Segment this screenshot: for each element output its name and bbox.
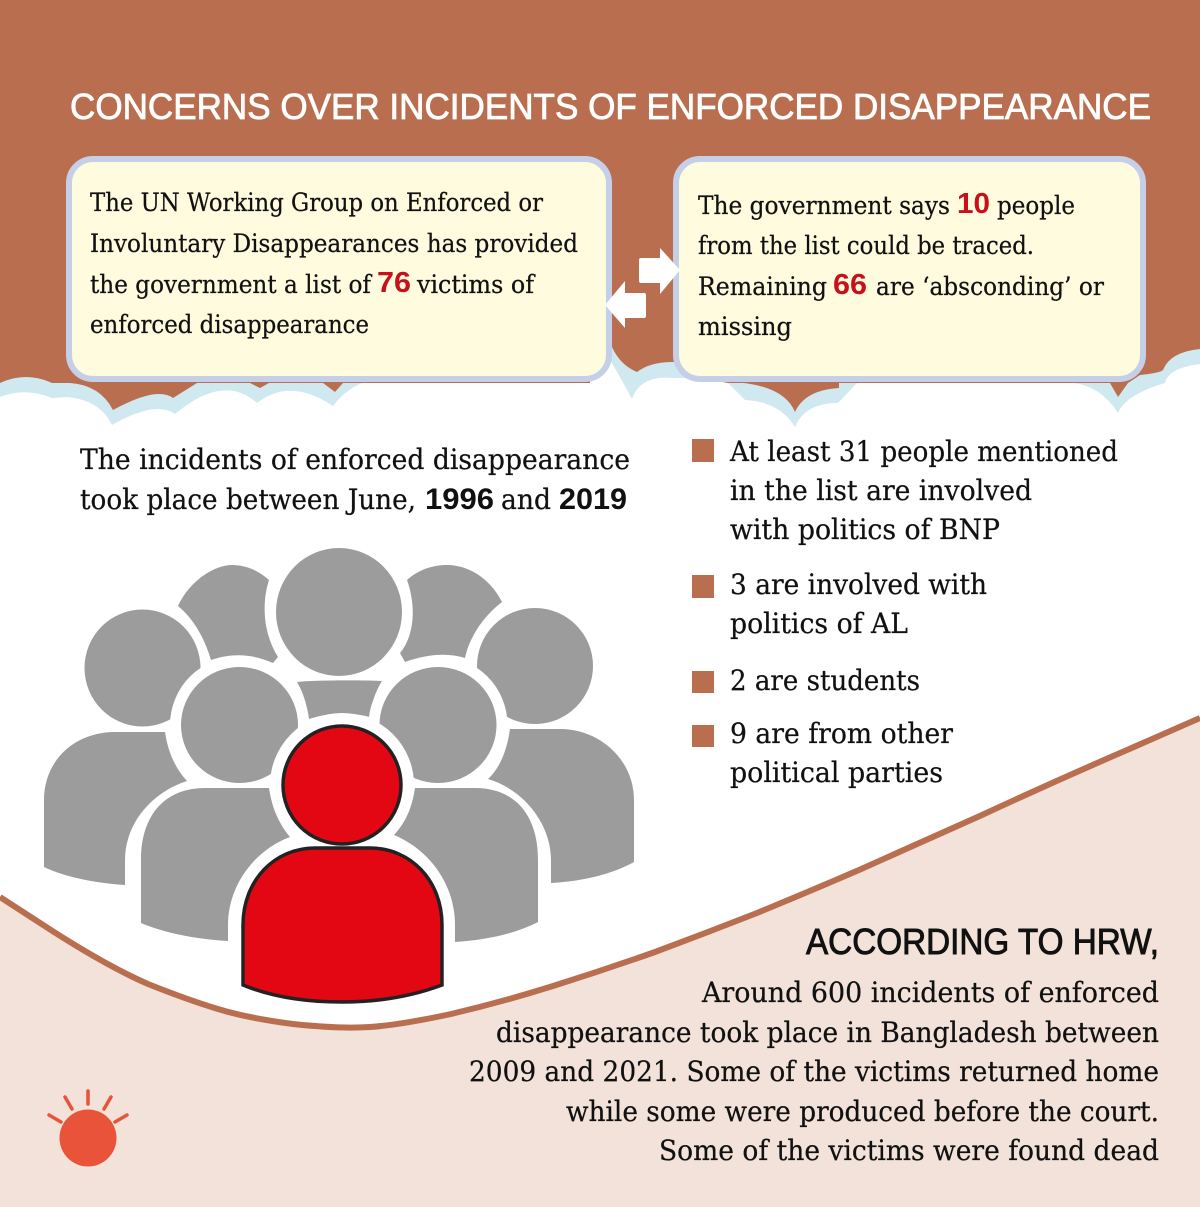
bullet: AL: 3 are involved with — [730, 568, 987, 601]
icon: sun logo — [49, 1091, 127, 1166]
panel: UN list of victims — [69, 159, 609, 379]
icon: exchange arrows — [605, 248, 680, 328]
panel text: UN list: 76 — [377, 267, 411, 299]
bullet: BNP: in the list are involved — [730, 474, 1032, 507]
top brown banner — [0, 0, 1200, 432]
bullet: BNP — [692, 435, 1118, 546]
icon: group of people with one red figure — [44, 548, 634, 1002]
panel text: UN list: enforced disappearance — [90, 310, 369, 339]
panel text: government response: 66 — [833, 269, 867, 301]
heading: according to HRW: ACCORDING TO HRW, — [806, 921, 1159, 962]
bullet: students: 2 are students — [730, 664, 920, 697]
white cloud layer — [0, 360, 1200, 520]
bullet: other parties: political parties — [730, 756, 943, 789]
panel text: UN list: victims of — [416, 270, 536, 299]
panel text: UN list: The UN Working Group on Enforced or — [90, 188, 543, 217]
brown wave line — [0, 718, 1200, 1028]
panel text: government response: missing — [698, 312, 792, 341]
beige bottom area — [0, 718, 1200, 1207]
text: HRW statement — [469, 976, 1159, 1167]
panel text: UN list — [90, 188, 578, 339]
panel text: government response: The government says — [698, 191, 950, 220]
panel text: government response: 10 — [957, 188, 990, 220]
bullet: BNP: with politics of BNP — [730, 513, 1000, 546]
panel text: UN list: the government a list of — [90, 270, 373, 299]
bullet: AL: politics of AL — [730, 607, 908, 640]
text: HRW statement: while some were produced before the court. — [566, 1095, 1159, 1128]
bullet: other parties: 9 are from other — [730, 717, 954, 750]
text: period of incidents: 2019 — [559, 483, 627, 516]
panel text: government response — [698, 188, 1104, 341]
text: period of incidents: took place between June, — [80, 483, 416, 516]
panel text: government response: are ‘absconding’ or — [876, 272, 1104, 301]
panel text: government response: from the list could be traced. — [698, 231, 1034, 260]
text: period of incidents — [80, 443, 630, 516]
text: period of incidents: and — [501, 483, 551, 516]
bullet: other parties — [692, 717, 954, 789]
text: HRW statement: Some of the victims were found dead — [659, 1134, 1159, 1167]
list: breakdown of victims — [692, 435, 1118, 789]
bullet: AL — [692, 568, 987, 640]
text: period of incidents: The incidents of enforced disappearance — [80, 443, 630, 476]
panel text: government response: people — [997, 191, 1075, 220]
panel text: UN list: Involuntary Disappearances has provided — [90, 229, 578, 258]
title: CONCERNS OVER INCIDENTS OF ENFORCED DISAPPEARANCE — [70, 86, 1151, 127]
text: HRW statement: 2009 and 2021. Some of the victims returned home — [469, 1055, 1159, 1088]
blue cloud layer — [0, 347, 1200, 470]
icon: red figure — [243, 726, 442, 1002]
text: period of incidents: 1996 — [425, 483, 494, 516]
text: HRW statement: Around 600 incidents of enforced — [701, 976, 1159, 1009]
bullet: BNP: At least 31 people mentioned — [729, 435, 1118, 468]
text: HRW statement: disappearance took place in Bangladesh between — [496, 1016, 1159, 1049]
panel: government response — [676, 159, 1143, 379]
panel text: government response: Remaining — [698, 272, 827, 301]
